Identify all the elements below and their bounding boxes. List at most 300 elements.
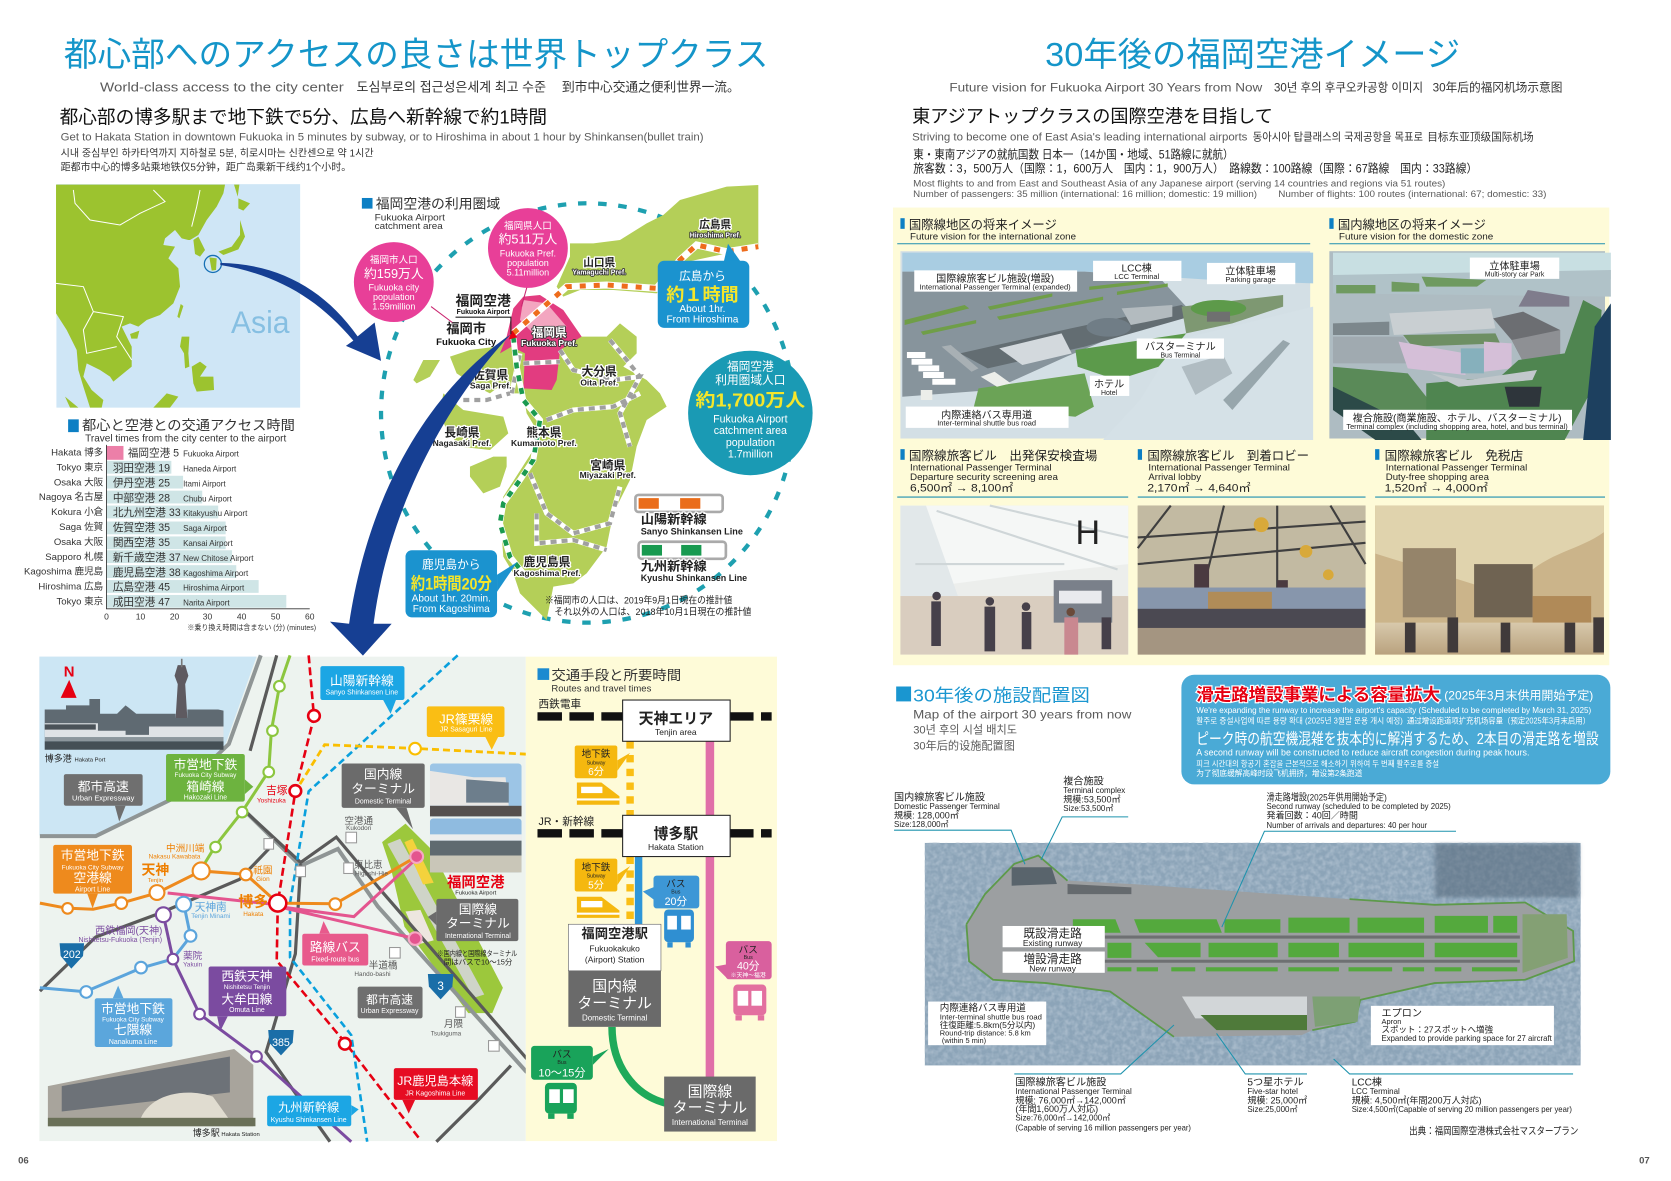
callout boxes on the map: Nishitetsu Tenjin — [224, 984, 271, 991]
prefecture labels: 山口県 — [583, 257, 616, 269]
chart: travel times: Sapporo 札幌 — [45, 551, 104, 563]
chart: travel times: Tokyo 東京 — [56, 596, 104, 608]
callout: runway expansion — [1181, 675, 1610, 784]
callout: runway expansion: 为了彻底缓解高峰时段飞机拥挤，增设第2条跑道 — [1196, 768, 1362, 778]
Fukuoka Airport station and domestic terminal: 福岡空港駅 — [581, 926, 648, 941]
bus 20 min callout — [643, 876, 699, 908]
bus 40 min callout: バス — [739, 945, 758, 956]
icon: train 1 — [577, 783, 619, 805]
prefecture labels: 佐賀県 — [473, 368, 508, 382]
callout boxes on the map: 七隈線 — [114, 1022, 152, 1037]
prefecture labels: 福岡県 — [532, 325, 567, 339]
line and station labels — [78, 785, 518, 1037]
label: apron: スポット：27スポットへ増強 — [1382, 1024, 1493, 1034]
callout: LCC: Size:4,500㎡(Capable of serving 20 million passengers per year) — [1352, 1105, 1572, 1114]
heading: arrival lobby: 国際線旅客ビル 到着ロビー — [1147, 448, 1309, 463]
heading: domestic zone — [1329, 217, 1605, 244]
aerial: domestic zone: Terminal complex (including shopping area, hotel, and bus terminal) — [1346, 424, 1568, 431]
heading: domestic zone: Future vision for the domestic zone — [1339, 231, 1493, 241]
page 07 heading and facts: Striving to become one of East Asia's leading international airports — [912, 132, 1247, 144]
prefecture labels: 熊本県 — [526, 425, 562, 439]
rail lines — [40, 655, 527, 1142]
aerial: international zone — [900, 251, 1313, 440]
heading: facility map: 30年后的设施配置图 — [913, 738, 1015, 752]
catchment population circle: population — [726, 437, 775, 449]
callout: terminal complex: 複合施設 — [1063, 774, 1104, 787]
population note: ※福岡市の人口は、2019年9月1日現在の推計値 — [545, 594, 733, 606]
catchment population circle: 約1,700万人 — [696, 391, 805, 411]
photo: Hakata Station: Hakata Station — [221, 1132, 260, 1138]
line and station labels: Tsukiguma — [431, 1030, 462, 1037]
Fukuoka city population circle: population — [373, 292, 415, 302]
callout boxes on the map: Fukuoka City Subway — [175, 772, 237, 779]
page 07 title: 30年後の福岡空港イメージ — [1045, 37, 1460, 74]
chart: travel times: 成田空港 47 — [113, 597, 170, 609]
line and station labels: 間はバスで10〜15分 — [444, 957, 513, 966]
callout: second runway: Second runway (scheduled to be completed by 2025) — [1267, 802, 1451, 811]
label: shuttle road: (within 5 min) — [942, 1036, 987, 1045]
page number 06: 06 — [18, 1155, 29, 1166]
callout boxes on the map: ターミナル — [446, 915, 510, 930]
prefecture labels: Fukuoka Pref. — [521, 338, 577, 348]
icon: pink bus — [733, 985, 766, 1021]
prefecture labels: Nagasaki Pref. — [433, 438, 491, 448]
callout boxes on the map: 国内線 — [364, 766, 403, 781]
chart: travel times: Tokyo 東京 — [56, 461, 104, 473]
line and station labels: 博多 — [238, 892, 268, 910]
heading: arrival lobby: 2,170㎡ → 4,640㎡ — [1147, 483, 1251, 495]
aerial: domestic zone: 立体駐車場 — [1489, 259, 1540, 272]
roads — [40, 655, 527, 1142]
from Hiroshima callout: 広島から — [679, 269, 726, 283]
line and station labels: ※国内線と国際線ターミナル — [437, 948, 518, 958]
page 07 heading and facts: Number of flights: 100 routes (international: 67; domestic: 33) — [1278, 189, 1546, 200]
callout: terminal complex: 規模:53,500㎡ — [1063, 795, 1121, 805]
subway 6 min callout: Subway — [587, 761, 606, 767]
heading: departure security: 6,500㎡ → 8,100㎡ — [910, 483, 1014, 495]
page 06 heading and description: 시내 중심부인 하카타역까지 지하철로 5분, 히로시마는 신칸센으로 약 1시간 — [61, 146, 374, 159]
chart: travel times: Fukuoka Airport — [183, 450, 240, 459]
north arrow: N — [64, 665, 75, 681]
heading: international zone: 国際線地区の将来イメージ — [909, 217, 1057, 232]
callout boxes on the map: Nanakuma Line — [109, 1039, 157, 1046]
line and station labels: Hakata — [243, 911, 264, 918]
shinkansen legend: Kyushu Shinkansen Line — [641, 573, 747, 584]
line and station labels: Higashi-Hie — [355, 871, 388, 878]
aerial: international zone: Bus Terminal — [1160, 353, 1201, 360]
page 07 subtitle: 30年后的福冈机场示意图 — [1433, 81, 1562, 95]
page 07 heading and facts: 東アジアトップクラスの国際空港を目指して — [912, 106, 1273, 126]
line and station labels: 天神南 — [195, 901, 227, 913]
line and station labels: Nakasu Kawabata — [149, 854, 201, 861]
callout boxes on the map: 西鉄天神 — [221, 968, 272, 983]
Hakata Station box: 博多駅 — [654, 825, 698, 843]
prefecture labels: 広島県 — [699, 218, 732, 231]
chart: travel times: Hakata 博多 — [51, 447, 103, 459]
chart: travel times: Itami Airport — [183, 479, 226, 488]
callout: second runway: Number of arrivals and departures: 40 per hour — [1267, 821, 1428, 830]
heading: international zone — [897, 217, 1310, 244]
callout boxes on the map: 市営地下鉄 — [61, 848, 125, 863]
panel: city rail map — [39, 655, 527, 1142]
page 06 heading and description: 距都市中心的博多站乘地铁仅5分钟，距广岛乘新干线约1个小时。 — [61, 160, 351, 173]
prefecture labels: 鹿児島県 — [524, 555, 571, 569]
arrow: Fukuoka to bottom map — [330, 334, 511, 656]
prefecture labels: 宮崎県 — [590, 458, 626, 472]
callout boxes on the map: 九州新幹線 — [278, 1100, 339, 1114]
Fukuoka prefecture population circle: 5.11million — [507, 268, 549, 278]
panel: routes and travel times: 西鉄電車 — [539, 697, 582, 710]
heading: arrival lobby: International Passenger Terminal — [1148, 462, 1290, 473]
bus 40 min callout: ※天神〜福港 — [731, 971, 766, 979]
prefecture labels: Fukuoka City — [436, 337, 497, 348]
line and station labels: 福岡空港 — [447, 873, 505, 891]
bus 10-15 min callout: Bus — [557, 1060, 567, 1066]
north arrow — [61, 665, 77, 698]
label: apron — [1371, 1006, 1554, 1045]
leader lines — [894, 817, 1573, 1074]
page 07 heading and facts: Most flights to and from East and Southeast Asia of any Japanese airport (serving 14 countries and regions via 51 routes) — [913, 178, 1445, 189]
aerial: international zone: Inter-terminal shuttle bus road — [937, 419, 1036, 428]
label: runways: 増設滑走路 — [1023, 952, 1082, 966]
population note — [545, 594, 752, 618]
callout: runway expansion: (2025年3月末供用開始予定) — [1444, 688, 1593, 702]
heading: arrival lobby: Arrival lobby — [1148, 472, 1201, 483]
heading: departure security: International Passenger Terminal — [910, 462, 1052, 473]
callout: LCC: LCC棟 — [1352, 1076, 1382, 1089]
callout boxes on the map: JR篠栗線 — [439, 711, 493, 726]
aerial: international zone: Hotel — [1101, 390, 1118, 397]
page 06 title: 都心部へのアクセスの良さは世界トップクラス — [64, 37, 768, 74]
line and station labels: Yoshizuka — [257, 798, 286, 805]
chart: travel times: 都心と空港との交通アクセス時間 — [82, 417, 295, 433]
chart: travel times: New Chitose Airport — [183, 554, 254, 563]
Fukuoka city population circle: 約159万人 — [364, 266, 424, 281]
prefecture labels: Kumamoto Pref. — [511, 438, 577, 448]
aerial: international zone: Parking garage — [1225, 275, 1276, 284]
from Kagoshima callout — [406, 550, 517, 617]
prefecture labels: Saga Pref. — [470, 380, 511, 390]
line and station labels: 西鉄福岡(天神) — [95, 924, 162, 937]
aerial: domestic zone: Multi-story car Park — [1485, 272, 1545, 279]
chart: travel times: Saga Airport — [183, 524, 228, 533]
callout: hotel: Five-star hotel — [1247, 1087, 1298, 1096]
line and station labels: Yakuin — [183, 962, 203, 969]
callout boxes on the map: Hakozaki Line — [184, 794, 227, 801]
panel: routes and travel times: JR・新幹線 — [539, 815, 595, 828]
bus 20 min callout: バス — [666, 879, 685, 890]
panel: routes and travel times: 交通手段と所要時間 — [551, 668, 681, 683]
chart: travel times: Hiroshima Airport — [183, 584, 245, 593]
stations — [62, 681, 499, 1062]
catchment population circle — [688, 351, 813, 475]
photo: Hakata Port: Hakata Port — [75, 757, 106, 763]
callout: international terminal: 規模: 76,000㎡→142,000㎡ — [1015, 1096, 1126, 1106]
Tenjin area box: 天神エリア — [639, 710, 713, 727]
heading: arrival lobby — [1138, 448, 1366, 497]
Fukuoka prefecture population circle: population — [507, 258, 549, 268]
panel: routes and travel times: Routes and travel times — [551, 684, 652, 694]
from Hiroshima callout: From Hiroshima — [667, 315, 739, 326]
callout: domestic terminal: 規模: 128,000㎡ — [894, 810, 959, 820]
prefecture labels: Yamaguchi Pref. — [572, 270, 626, 277]
chart: travel times: 鹿児島空港 38 — [113, 566, 181, 579]
subway 5 min callout: 地下鉄 — [582, 861, 611, 873]
page 07 subtitle: Future vision for Fukuoka Airport 30 Years from Now — [949, 82, 1263, 95]
chart: travel times: 0 — [104, 611, 109, 621]
road shields: 385 — [272, 1037, 290, 1049]
chart: travel times — [24, 417, 317, 632]
subway 6 min callout: 地下鉄 — [582, 748, 611, 760]
heading: facility map: 30年後の施設配置図 — [913, 685, 1090, 705]
heading: departure security: 国際線旅客ビル 出発保安検査場 — [909, 448, 1097, 463]
Fukuoka Airport station and domestic terminal: ターミナル — [577, 995, 652, 1012]
callout boxes on the map: 市営地下鉄 — [101, 1001, 165, 1016]
line and station labels: 天神 — [142, 862, 169, 878]
aerial: international zone: International Passenger Terminal (expanded) — [920, 283, 1071, 292]
page 06 heading and description: Get to Hakata Station in downtown Fukuoka in 5 minutes by subway, or to Hiroshima in about 1 hour by Shinkansen(bullet train) — [61, 132, 704, 144]
Fukuoka prefecture population circle: 約511万人 — [499, 232, 557, 247]
bus 20 min callout: 20分 — [665, 896, 687, 908]
chart: travel times: 20 — [170, 611, 180, 621]
page number 07: 07 — [1639, 1155, 1650, 1166]
catchment population circle: catchment area — [714, 425, 787, 437]
Fukuoka prefecture population circle: 福岡県人口 — [504, 220, 552, 232]
callout boxes on the map: JR Sasaguri Line — [440, 727, 493, 734]
callout boxes on the map: 空港線 — [73, 870, 112, 885]
label: apron: エプロン — [1382, 1007, 1422, 1019]
callout boxes on the map: 路線バス — [310, 940, 361, 955]
callout boxes on the map: 国際線 — [459, 902, 497, 917]
line and station labels: Fukuoka Airport — [455, 891, 497, 897]
callout boxes on the map: Urban Expressway — [72, 794, 135, 802]
chart: travel times: 羽田空港 19 — [113, 463, 170, 475]
callout boxes on the map: JR Kagoshima Line — [405, 1091, 465, 1098]
international terminal box: 国際線 — [688, 1084, 732, 1101]
panel: routes and travel times — [526, 657, 777, 1141]
prefecture labels: Kagoshima Pref. — [514, 568, 581, 578]
photo: duty free — [1375, 506, 1604, 655]
aerial: international zone: ホテル — [1094, 378, 1124, 390]
callout boxes on the map: Airport Line — [75, 886, 110, 893]
airport site — [382, 824, 503, 1013]
line and station labels: Hando-bashi — [354, 971, 391, 978]
callout: domestic terminal: 国内線旅客ビル施設 — [894, 790, 985, 803]
callout boxes on the map: JR鹿児島本線 — [397, 1073, 473, 1088]
chart: travel times: 広島空港 45 — [113, 581, 170, 594]
prefecture labels: 福岡空港 — [456, 292, 511, 308]
Hakata Station box: Hakata Station — [648, 842, 704, 852]
Fukuoka Airport station and domestic terminal: Fukuokakuko — [589, 944, 640, 954]
label: shuttle road: 往復距離:5.8km(5分以内) — [940, 1020, 1035, 1030]
chart: travel times: 30 — [203, 611, 213, 621]
callout: domestic terminal: Size:128,000㎡ — [894, 820, 949, 829]
from Hiroshima callout — [658, 244, 749, 328]
line and station labels: 半道橋 — [369, 960, 398, 972]
chart: travel times: 50 — [271, 611, 281, 621]
chart: travel times: 佐賀空港 35 — [113, 521, 170, 534]
subway 5 min callout — [575, 859, 630, 891]
callout boxes on the map: Fixed-route bus — [311, 956, 360, 963]
from Kagoshima callout: 鹿児島から — [422, 557, 481, 571]
aerial: international zone: LCC Terminal — [1114, 272, 1160, 281]
line and station labels: Nishitetsu-Fukuoka (Tenjin) — [78, 937, 162, 944]
chart: travel times: Chubu Airport — [183, 494, 233, 503]
from Kagoshima callout: From Kagoshima — [413, 604, 490, 615]
chart: travel times: 伊丹空港 25 — [113, 477, 170, 489]
line and station labels: 吉塚 — [266, 785, 288, 797]
chart: travel times: Kitakyushu Airport — [183, 509, 248, 518]
aerial: domestic zone — [1329, 251, 1611, 440]
callout: runway expansion: We're expanding the runway to increase the airport's capacity (Scheduled to be completed by March 31, 2025) — [1196, 706, 1592, 715]
source note: 出典：福岡国際空港株式会社マスタープラン — [1409, 1125, 1578, 1138]
page 07 heading and facts: 東・東南アジアの就航国数 日本一（14か国・地域、51路線に就航） — [913, 148, 1234, 162]
subway 6 min callout: 6分 — [588, 766, 604, 778]
callout: runway expansion: 활주로 증설사업에 따른 용량 확대 (2025년 3월말 운용 개시 예정) — [1196, 716, 1403, 726]
prefecture labels: Oita Pref. — [580, 377, 618, 387]
from Hiroshima callout: About 1hr. — [679, 304, 726, 315]
from Kagoshima callout: About 1hr. 20min. — [412, 593, 491, 604]
callout: terminal complex: Terminal complex — [1063, 786, 1125, 795]
chart: travel times: Kagoshima 鹿児島 — [24, 566, 104, 578]
aerial: international zone: 立体駐車場 — [1225, 265, 1276, 278]
page 07 subtitle — [949, 81, 1562, 95]
aerial: international zone: バスターミナル — [1145, 341, 1216, 353]
international terminal box: ターミナル — [673, 1100, 747, 1117]
chart: travel times: ※乗り換え時間は含まない (分) (minutes) — [187, 622, 317, 632]
Fukuoka prefecture population circle — [488, 208, 568, 288]
callout: runway expansion: 通过增设跑道项扩充机场容量（预定2025年3月末启用） — [1407, 716, 1590, 726]
photo: security area: H — [1075, 514, 1100, 552]
bus 40 min callout: Bus — [744, 955, 753, 961]
page 06 multilingual subtitle — [100, 80, 740, 95]
bus 10-15 min callout — [531, 1046, 609, 1080]
photo: Hakata Port: 博多港 — [45, 752, 72, 763]
chart: travel times: Osaka 大阪 — [54, 476, 104, 488]
Hakata Station box — [623, 815, 730, 857]
photo: arrival lobby — [1138, 506, 1366, 655]
chart: travel times: Haneda Airport — [183, 465, 237, 474]
line and station labels: 東比恵 — [354, 859, 383, 871]
callout: second runway: 発着回数：40回／時間 — [1267, 809, 1358, 820]
Fukuoka Airport station and domestic terminal: 国内線 — [592, 978, 637, 995]
from Hiroshima callout: 約１時間 — [666, 285, 739, 305]
heading: facility map — [896, 685, 1132, 752]
callout: international terminal: 国際線旅客ビル施設 — [1015, 1076, 1106, 1089]
callout: hotel: 5つ星ホテル — [1247, 1077, 1304, 1089]
chart: travel times: 中部空港 28 — [113, 491, 170, 504]
callout boxes on the map: Omuta Line — [229, 1007, 265, 1014]
callout: international terminal: (Capable of serving 16 million passengers per year) — [1015, 1123, 1191, 1132]
bus 20 min callout: Bus — [671, 890, 681, 896]
chart: travel times: Kagoshima Airport — [183, 569, 249, 578]
callout boxes on the map: ターミナル — [351, 781, 415, 796]
callout boxes on the map: Domestic Terminal — [355, 799, 412, 806]
population note: それ以外の人口は、2018年10月1日現在の推計値 — [555, 606, 752, 618]
Fukuoka Airport station and domestic terminal: (Airport) Station — [585, 954, 645, 964]
chart: travel times: Hiroshima 広島 — [38, 581, 104, 593]
chart: travel times: Travel times from the city center to the airport — [85, 434, 286, 445]
photo: Hakata Station: 博多駅 — [193, 1127, 220, 1138]
callout: international terminal — [1015, 1076, 1191, 1132]
icon: green bus — [545, 1083, 577, 1119]
chart: travel times: 福岡空港 5 — [128, 447, 179, 460]
subway 5 min callout: Subway — [587, 874, 606, 880]
line and station labels: 月隈 — [444, 1019, 463, 1030]
callout boxes on the map: Fukuoka City Subway — [102, 1017, 165, 1024]
callout: runway expansion: A second runway will be constructed to reduce aircraft congestion during peak hours. — [1196, 748, 1529, 758]
callout: runway expansion: ピーク時の航空機混雑を抜本的に解消するため、2本目の滑走路を増設 — [1196, 730, 1599, 748]
callout: international terminal: International Passenger Terminal — [1015, 1087, 1132, 1096]
shinkansen legend: 山陽新幹線 — [641, 512, 707, 527]
aerial: international zone: LCC棟 — [1122, 261, 1152, 274]
line and station labels: 中洲川端 — [166, 842, 205, 854]
line and station labels: Tenjin — [148, 878, 163, 884]
chart: travel times: Nagoya 名古屋 — [39, 491, 104, 503]
label: apron: Apron — [1382, 1017, 1401, 1026]
callout: runway expansion: 피크 시간대의 항공기 혼잡을 근본적으로 해소하기 위하여 두 번째 활주로를 증설 — [1196, 758, 1439, 768]
Fukuoka city population circle: Fukuoka city — [368, 283, 420, 293]
page 06 multilingual subtitle: 도심부로의 접근성은세계 최고 수준 — [357, 80, 546, 95]
callout boxes on the map: 市営地下鉄 — [174, 757, 238, 772]
Fukuoka city population circle — [354, 242, 434, 322]
callout: international terminal: Size:76,000㎡→142,000㎡ — [1015, 1114, 1110, 1123]
label: shuttle road — [928, 1002, 1046, 1045]
callout boxes on the map: 大牟田線 — [221, 992, 273, 1007]
line and station labels: 薬院 — [183, 950, 203, 962]
bus 40 min callout — [715, 941, 772, 979]
aerial: international zone: 内際連絡バス専用道 — [941, 408, 1032, 421]
page 07 heading and facts: 동아시아 탑클래스의 국제공항을 목표로 — [1253, 132, 1423, 144]
chart: travel times: 関西空港 35 — [113, 537, 170, 549]
heading: duty free: 1,520㎡ → 4,000㎡ — [1385, 483, 1488, 495]
Asia locator map: Asia — [231, 304, 290, 340]
heading: duty free: Duty-free shopping area — [1386, 472, 1490, 483]
page 06 multilingual subtitle: World-class access to the city center — [100, 80, 344, 95]
callout: hotel — [1247, 1077, 1307, 1114]
bus 10-15 min callout: 10〜15分 — [538, 1067, 586, 1080]
subway 5 min callout: 5分 — [588, 879, 604, 891]
photo: security area — [900, 506, 1128, 655]
callout boxes on the map: 山陽新幹線 — [330, 673, 394, 688]
page 07 subtitle: 30년 후의 후쿠오카공항 이미지 — [1274, 82, 1423, 95]
page 07 heading and facts: 旅客数：3，500万人（国際：1，600万人 国内：1，900万人） 路線数：100路線（国際：67路線 国内：33路線） — [913, 161, 1477, 175]
catchment map of Kyushu — [381, 185, 794, 623]
chart: travel times: Kansai Airport — [183, 539, 233, 548]
heading: facility map: 30년 후의 시설 배치도 — [913, 723, 1017, 736]
heading: catchment area: Fukuoka Airport — [375, 212, 445, 223]
Asia locator map — [56, 184, 300, 408]
callout: LCC — [1352, 1076, 1572, 1114]
subway 6 min callout — [575, 746, 630, 778]
callout: domestic terminal — [894, 790, 1000, 829]
chart: travel times: Kokura 小倉 — [51, 507, 104, 518]
callout boxes on the map — [53, 666, 518, 1126]
shinkansen legend: 九州新幹線 — [641, 558, 707, 573]
heading: international zone: Future vision for the international zone — [910, 231, 1076, 241]
heading: departure security: Departure security screening area — [910, 472, 1059, 483]
photo: Hakata Station — [48, 1049, 260, 1138]
panel: future images — [893, 208, 1611, 665]
label: runways: Existing runway — [1023, 938, 1083, 948]
page 07 heading and facts: 目标东亚顶级国际机场 — [1427, 131, 1534, 144]
chart: travel times: 北九州空港 33 — [113, 507, 181, 519]
chart: travel times: 新千歳空港 37 — [113, 552, 181, 564]
Fukuoka Airport station and domestic terminal: Domestic Terminal — [582, 1014, 648, 1022]
page 06 multilingual subtitle: 到市中心交通之便利世界一流。 — [562, 80, 740, 95]
callout boxes on the map: Kyushu Shinkansen Line — [271, 1117, 347, 1124]
line and station labels: Gion — [256, 876, 270, 883]
